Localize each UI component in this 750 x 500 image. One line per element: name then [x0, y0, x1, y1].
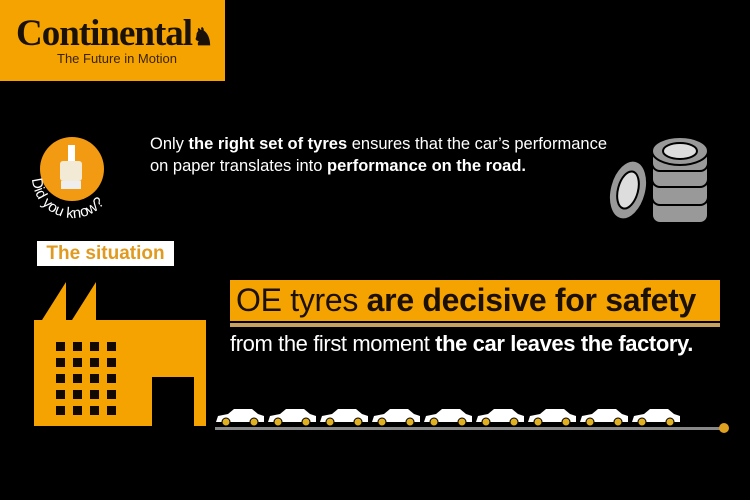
intro text: Only the right set of tyres ensures that the car’s performance: [150, 135, 607, 153]
tagline: The Future in Motion: [57, 51, 177, 66]
intro text: on paper translates into performance on the road.: [150, 157, 526, 175]
icon: tyre stack: [610, 138, 707, 222]
badge text: Did you know?: [32, 178, 102, 218]
section label: The situation: [46, 243, 165, 264]
did you know badge: [32, 137, 104, 218]
icon: factory: [34, 282, 206, 426]
icon: hand: [40, 137, 104, 201]
headline bar: OE tyres are decisive for safety: [236, 282, 696, 318]
logo box: [0, 0, 225, 81]
subheadline: from the first moment the car leaves the factory.: [230, 331, 693, 356]
intro text: [150, 135, 607, 175]
cars on road: [215, 409, 729, 433]
logo wordmark: Continental♞: [16, 13, 213, 54]
